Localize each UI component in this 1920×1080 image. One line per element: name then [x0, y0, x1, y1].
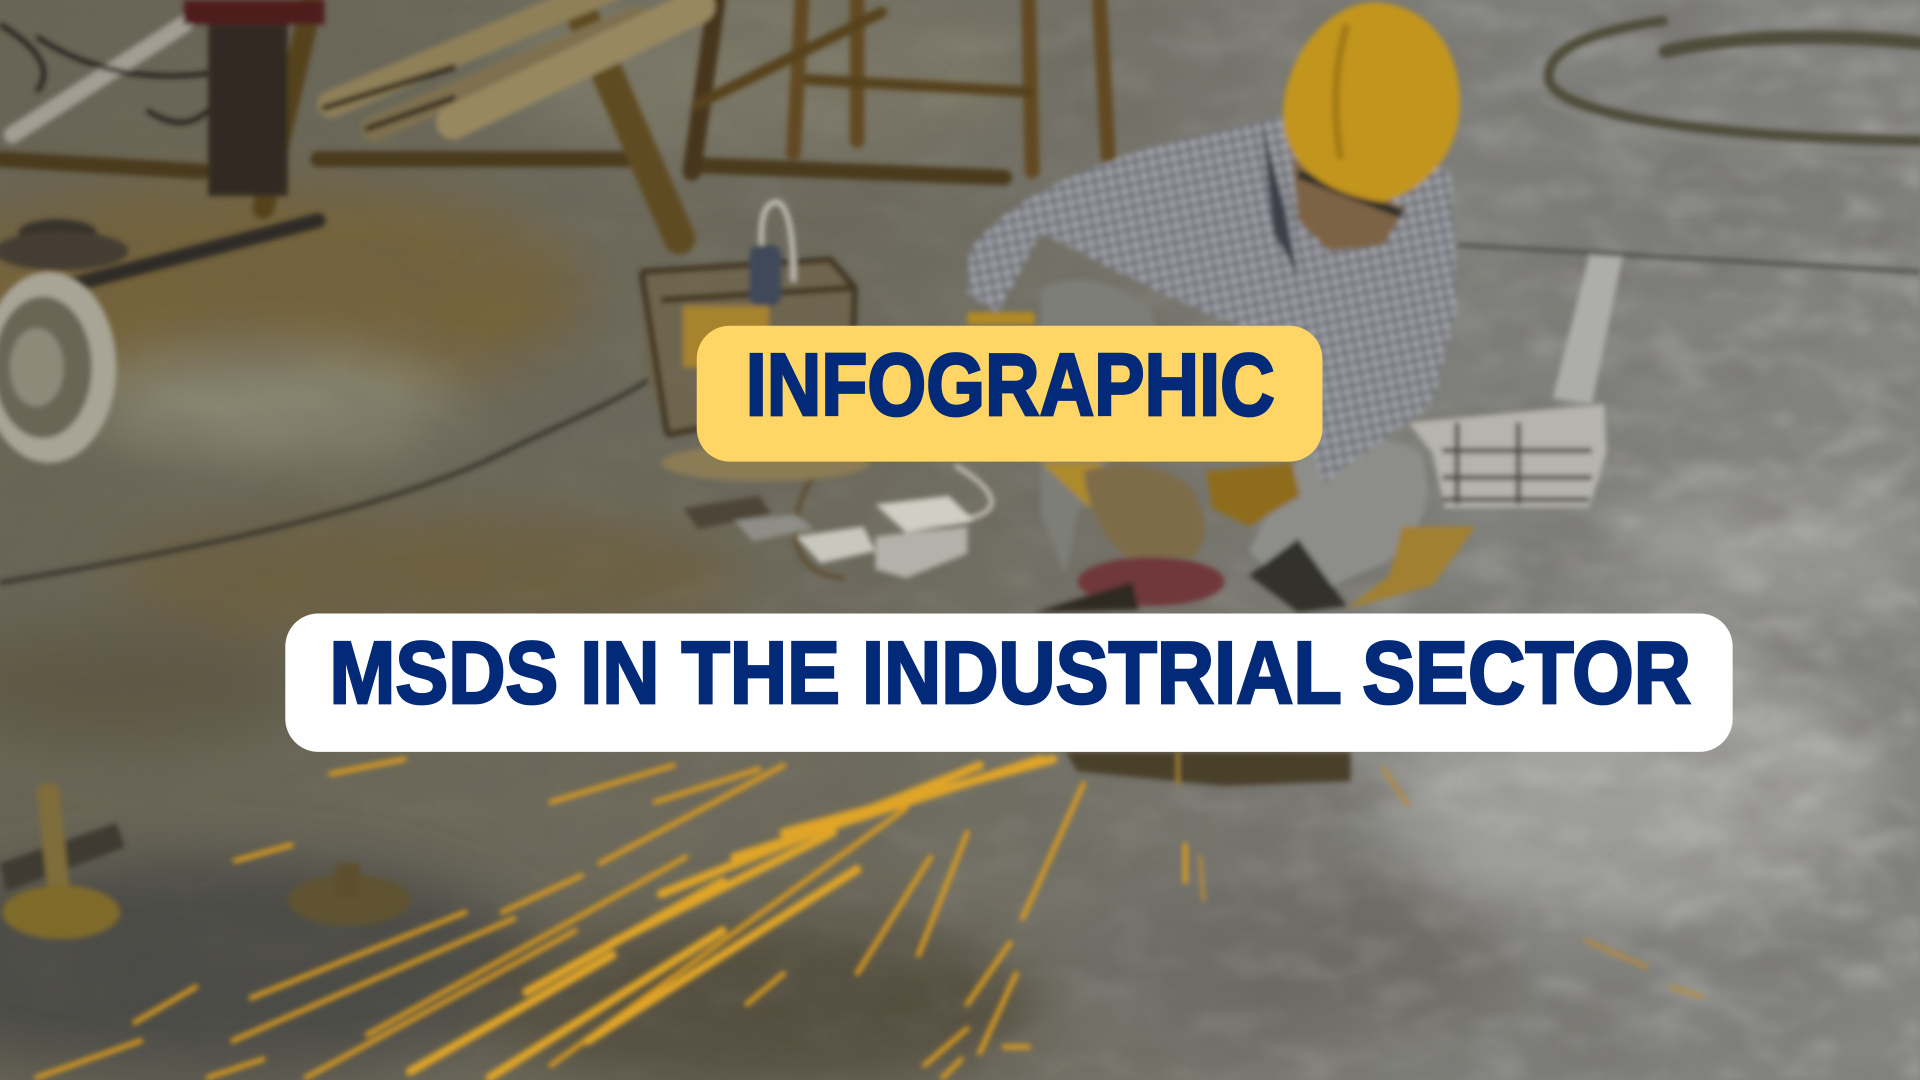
gloves and grinder [1041, 463, 1102, 508]
worker face [1292, 159, 1406, 251]
worker shirt [967, 116, 1457, 484]
worker with yellow hard hat [967, 2, 1476, 612]
electrical cables on floor [0, 380, 991, 583]
title banner: MSDS in the industrial sector [285, 613, 1733, 752]
pale floor markings [1457, 245, 1920, 404]
badge text: INFOGRAPHIC [746, 335, 1275, 434]
machinery at top left [0, 0, 1108, 288]
worker legs and trousers [1041, 280, 1169, 576]
welding box on stand [642, 202, 869, 481]
floor bolts bottom left [0, 783, 410, 939]
dark grinder shadow [1065, 752, 1351, 786]
scattered metal plates [683, 404, 1607, 578]
metal ring at top right [1540, 21, 1920, 153]
hard hat [1283, 2, 1460, 202]
title text: MSDS IN THE INDUSTRIAL SECTOR [329, 623, 1691, 722]
cable reel at left edge [0, 272, 116, 463]
orange grinding sparks [37, 753, 1702, 1078]
badge: INFOGRAPHIC [697, 326, 1322, 462]
